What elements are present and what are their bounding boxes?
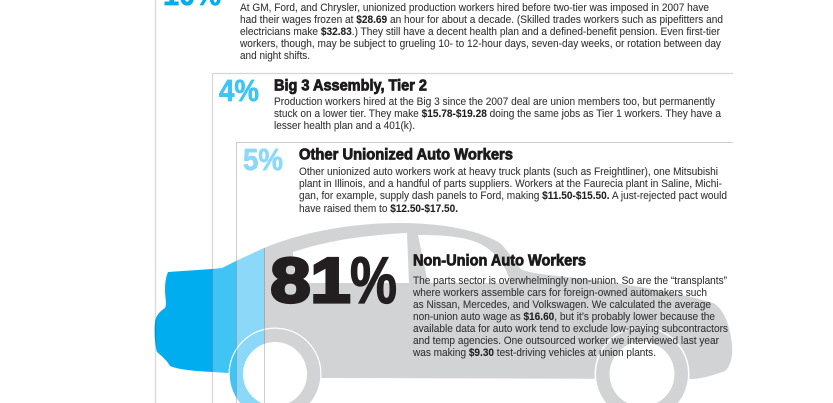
text block: other unionized description: gan, for example, supply dash panels to Ford, making $11.50-$15.50. A just-rejected pact would <box>299 190 727 202</box>
text block: non-union description: The parts sector is overwhelmingly non-union. So are the “transplants” <box>413 275 727 287</box>
panel: Big 3 Assembly, Tier 1 <box>163 0 723 62</box>
text block: tier 2 description: lesser health plan and a 401(k). <box>274 120 415 132</box>
tier box outlines <box>156 0 733 403</box>
text block: tier 1 description: had their wages frozen at $28.69 an hour for about a decade. (Skilled trades workers such as pipefitters and <box>240 14 723 26</box>
text block: tier 1 description: workers, though, may be subject to grueling 10- to 12-hour days, seven-day weeks, or rotation between day <box>239 38 721 50</box>
panel: Other Unionized Auto Workers <box>243 142 727 215</box>
text block: other unionized description: have raised them to $12.50-$17.50. <box>299 203 458 215</box>
text block: non-union description: available data for auto work tend to exclude low-paying subcontractors <box>413 323 728 335</box>
text block: non-union description: was making $9.30 test-driving vehicles at union plants. <box>412 347 656 359</box>
text block: tier 2 description: Production workers hired at the Big 3 since the 2007 deal are union members too, but permanently <box>274 96 715 108</box>
text block: other unionized description: plant in Illinois, and a handful of parts suppliers. Workers at the Faurecia plant in Saline, Michi- <box>299 178 722 190</box>
heading: tier 2: Big 3 Assembly, Tier 2 <box>274 78 427 94</box>
text block: tier 1 description: and night shifts. <box>240 50 310 62</box>
car silhouette <box>140 215 744 403</box>
text block: tier 1 description: electricians make $32.83.) They still have a decent health plan and a defined-benefit pension. Even first-tier <box>240 26 720 38</box>
panel: Big 3 Assembly, Tier 2 <box>219 73 722 132</box>
text block: non-union description: non-union auto wage as $16.60, but it’s probably lower because the <box>413 311 715 323</box>
text block: tier 1 description <box>239 2 723 62</box>
text block: non-union description <box>412 275 728 359</box>
panel: Non-Union Auto Workers <box>270 243 728 359</box>
percentage: 81%: 81 <box>270 246 350 316</box>
text block: other unionized description: Other unionized auto workers work at heavy truck plants (such as Freightliner), one Mitsubishi <box>299 166 718 178</box>
heading: non-union: Non-Union Auto Workers <box>413 252 586 270</box>
text block: tier 1 description: At GM, Ford, and Chrysler, unionized production workers hired before two-tier was imposed in 2007 have <box>240 2 709 14</box>
text block: non-union description: and temp agencies. One outsourced worker we interviewed last year <box>413 335 719 347</box>
percentage: 81%: % <box>350 243 397 317</box>
text block: other unionized description <box>299 166 727 215</box>
text block: non-union description: as Nissan, Mercedes, and Volkswagen. We calculated the average <box>413 299 711 311</box>
text block: tier 2 description <box>274 96 722 132</box>
percentage: 81% <box>270 243 397 317</box>
heading: other unionized: Other Unionized Auto Workers <box>299 146 513 164</box>
text block: non-union description: where workers assemble cars for foreign-owned automakers such <box>412 287 707 299</box>
text block: tier 2 description: stuck on a lower tier. They make $15.78-$19.28 doing the same jobs as Tier 1 workers. They have a <box>274 108 722 120</box>
percentage: 5%: 5% <box>243 142 283 177</box>
percentage: 4%: 4% <box>219 73 259 108</box>
